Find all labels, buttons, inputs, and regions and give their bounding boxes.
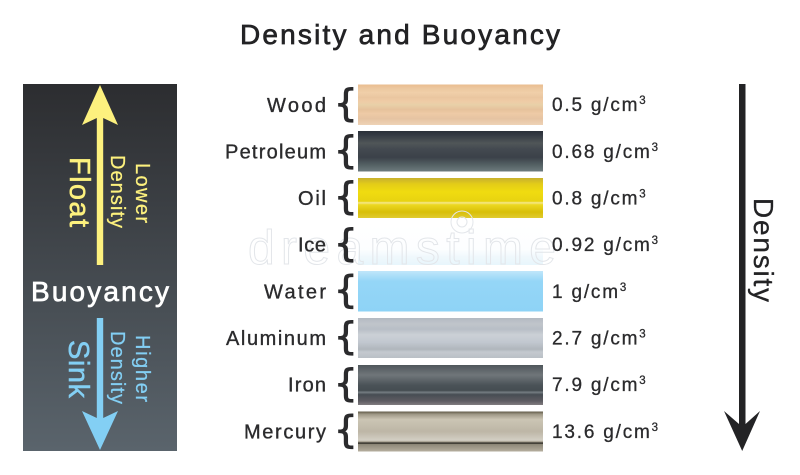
row: Ice label and value [298, 222, 658, 265]
label: Higher Density [106, 331, 153, 404]
row: Wood: Wood [267, 95, 326, 117]
label: Higher Density: Density [106, 331, 128, 404]
label: Density: Density [748, 198, 779, 302]
title: Density and Buoyancy [240, 19, 560, 50]
row: Water: 3 [620, 282, 626, 294]
row: Aluminum: 2.7 g/cm [552, 328, 639, 350]
row: Aluminum: { [334, 315, 358, 358]
row: Oil: 3 [639, 188, 646, 200]
watermark: dreamstime [248, 222, 556, 275]
arrow: float up [82, 85, 118, 265]
row: Ice label and value: { [334, 222, 358, 265]
label: Buoyancy: Buoyancy [31, 276, 169, 307]
label: Float: Float [63, 157, 95, 227]
row: Petroleum: 0.68 g/cm [552, 142, 652, 163]
row: Water: 1 g/cm [552, 282, 620, 303]
row: Mercury: Mercury [244, 422, 326, 444]
row: Water: Water [264, 282, 326, 304]
row: Wood: 0.5 g/cm [552, 95, 639, 116]
row: Iron: Iron [288, 374, 326, 396]
row: Oil: 0.8 g/cm [552, 188, 639, 210]
row: Mercury [244, 408, 658, 452]
row: Mercury: 13.6 g/cm [552, 422, 652, 443]
row: Petroleum: 3 [652, 142, 658, 154]
row: Ice label and value: 3 [652, 235, 658, 247]
row: Ice label and value: Ice [298, 234, 326, 256]
row: Iron [288, 362, 646, 405]
arrow: density scale [724, 84, 760, 451]
panel: buoyancy [23, 84, 177, 451]
row: Aluminum: 3 [639, 328, 646, 340]
row: Mercury: 3 [652, 422, 658, 434]
bar: Ice [358, 225, 543, 265]
row: Oil: { [334, 175, 358, 218]
row: Wood: { [334, 82, 358, 125]
arrow: sink down [82, 318, 118, 450]
row: Iron: { [334, 362, 358, 405]
label: Lower Density [106, 155, 153, 228]
label: Sink: Sink [62, 340, 94, 398]
row: Petroleum: { [334, 129, 358, 172]
row: Water [264, 268, 626, 312]
row: Aluminum: Aluminum [226, 328, 326, 350]
row: Ice label and value: 0.92 g/cm [552, 235, 652, 256]
row: Iron: 7.9 g/cm [552, 375, 639, 396]
label: Lower Density: Density [106, 155, 128, 228]
row: Petroleum: Petroleum [225, 142, 326, 164]
row: Mercury: { [334, 408, 358, 452]
row: Iron: 3 [639, 375, 646, 387]
row: Petroleum [225, 129, 658, 172]
label: Lower Density: Lower [131, 163, 153, 223]
row: Wood [267, 82, 646, 125]
row: Oil [298, 175, 646, 218]
row: Water: { [334, 268, 358, 312]
row: Oil: Oil [298, 188, 326, 210]
row: Wood: 3 [639, 95, 646, 107]
label: Higher Density: Higher [131, 335, 153, 402]
row: Aluminum [226, 315, 646, 358]
